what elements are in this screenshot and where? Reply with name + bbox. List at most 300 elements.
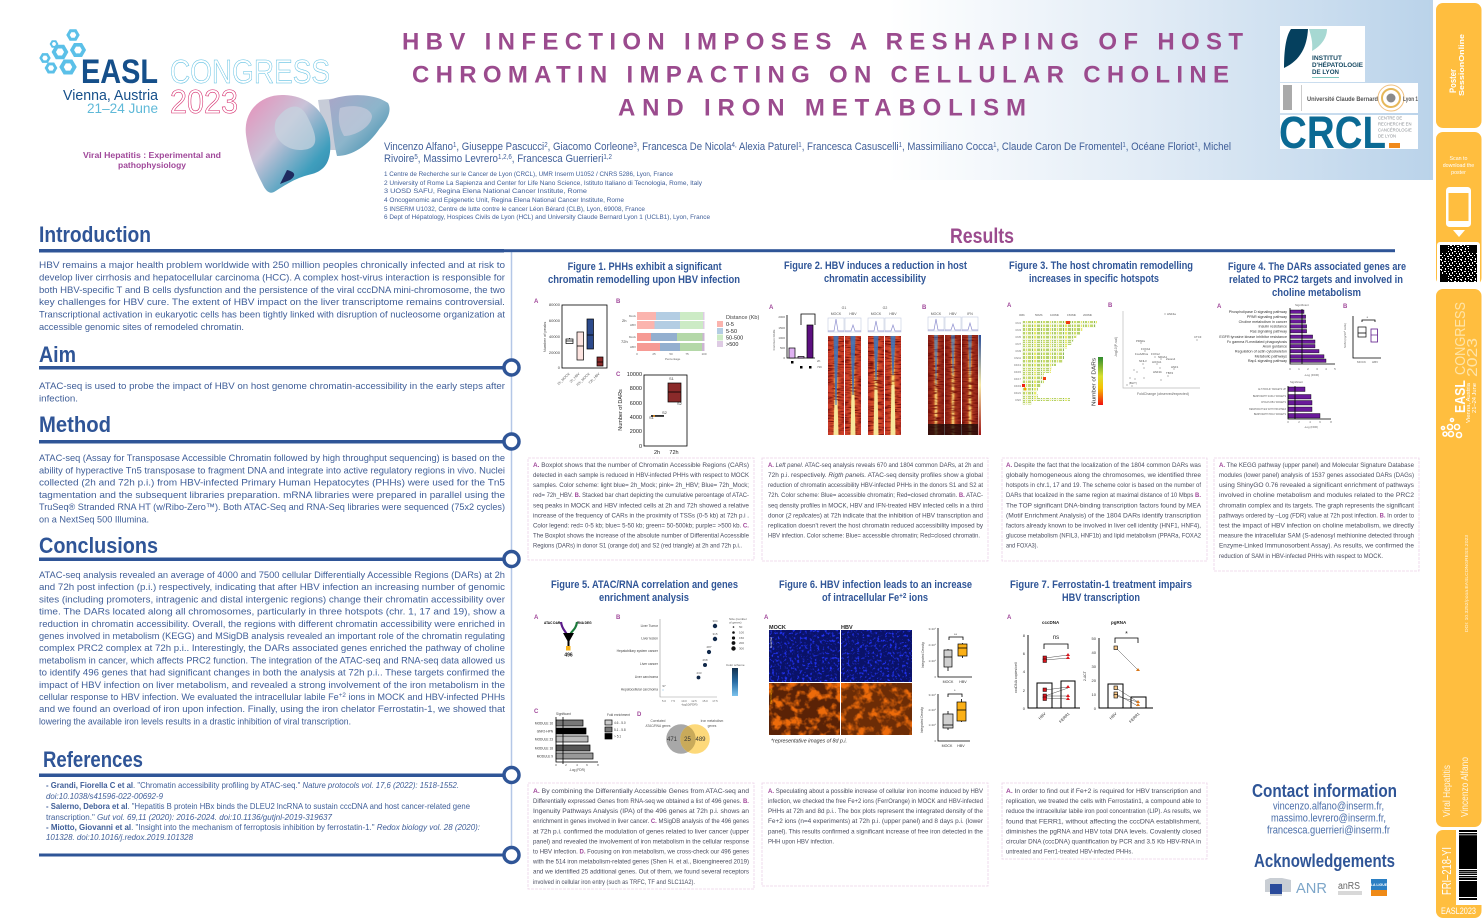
text: introduction body bbox=[39, 260, 505, 333]
figure 6 box plot: 72h bbox=[921, 627, 972, 684]
affiliations: 3 UOSD SAFU, Regina Elena National Cancer Institute, Rome bbox=[384, 188, 588, 195]
figure 4 panel A: KEGG pathway bars: PPAR signaling pathway bbox=[1247, 315, 1287, 319]
heading: Method: Method bbox=[39, 412, 111, 437]
figure 5 panel B: IPA dot plot: 315 bbox=[712, 632, 718, 636]
figure 6 box plot: 8d: 3×10⁶ bbox=[929, 693, 936, 697]
figure 2 panel A: common DARs bar chart: 1000 bbox=[778, 336, 785, 340]
figure 5 caption: A. By combining the Differentially Accessible Genes from ATAC-seq and bbox=[533, 788, 750, 795]
sidebar panel: scan to download: Scan to bbox=[1450, 156, 1468, 162]
figure 5 caption: involved in cellular iron entry (such as TRFC, TF and SLC11A2). bbox=[533, 879, 695, 886]
figure 7 chart: pgRNA: * bbox=[1125, 631, 1128, 638]
figure 3 panel B: transcription factor scatter: TBX3 bbox=[1166, 371, 1173, 375]
figure 5 panel A: overlap funnel: A bbox=[534, 615, 539, 621]
affiliations: 5 INSERM U1032, Centre de lutte contre le cancer Léon Bérard (CLB), Lyon, 69008, France bbox=[384, 206, 645, 213]
figure 6 box plot: 72h: HBV bbox=[959, 680, 967, 684]
logo: Université Claude Bernard Lyon 1: Lyon 1 bbox=[1403, 97, 1419, 103]
figure 7 chart: cccDNA: cccDNA bbox=[1042, 620, 1060, 625]
figure 5 caption: Differentially expressed Genes from RNA-seq we obtained a list of 496 genes. B. bbox=[533, 798, 749, 805]
figure 5 panel B: IPA dot plot: Liver lesion bbox=[641, 636, 658, 640]
figure 4 panel A: KEGG pathway bars bbox=[1217, 303, 1336, 377]
text: method body: ATAC-seq (Assay for Transposase Accessible Chromatin followed by high throughput sequencing) is based on the bbox=[39, 453, 505, 464]
figure 3 caption: DARs that localized in the same region at maximal distance of 10 Mbps B. bbox=[1006, 492, 1201, 499]
authors: 3 bbox=[633, 142, 637, 149]
figure 3 panel A: chromosome heatmap: 0Mb bbox=[1019, 313, 1025, 317]
figure 1 legend: distance: Distance (Kb) bbox=[726, 315, 759, 321]
figure 2 panel A: common DARs bar chart: 1500 bbox=[778, 326, 785, 330]
figure 7 chart: pgRNA: HBV bbox=[1108, 711, 1118, 721]
figure 4 panel A: KEGG pathway bars: EGFR tyrosine kinase inhibitor resistance bbox=[1219, 335, 1287, 339]
figure 2 panel A: common DARs bar chart bbox=[769, 305, 822, 369]
figure 5 panel B: IPA dot plot: 17.5 bbox=[712, 699, 718, 703]
figure 4 panel A: KEGG pathway bars: Significant bbox=[1295, 303, 1309, 307]
figure 5 caption: and we identified 25 additional genes. Out of them, we found several receptors bbox=[533, 869, 749, 876]
figure 3 caption: glucose metabolism (NFIL3, HNF1b) and lipid metabolism (PPARa, FOXA2 bbox=[1006, 533, 1201, 540]
figure 1 panel C: DARs box plot: 0 bbox=[639, 444, 642, 450]
figure 6 title: +2 bbox=[899, 591, 906, 600]
figure 1 panel A: box plot of peaks: 72h_MOCK bbox=[575, 371, 591, 387]
figure 6 microscopy panels: MOCK bbox=[769, 625, 786, 631]
logo: ANR: ANR bbox=[1296, 880, 1327, 897]
figure 3 panel A: chromosome heatmap: 200Mb bbox=[1083, 313, 1093, 317]
figure 5 panel C legend: fold enrichment: > 5.1 bbox=[614, 734, 621, 738]
title: HBV INFECTION IMPOSES A RESHAPING OF HOST bbox=[402, 28, 1243, 56]
heading: Results: Results bbox=[950, 225, 1014, 248]
text: conclusions body: genes involved in metabolism (KEGG) and MSigDB analysis revealed an important role of the chromatin regulating bbox=[39, 631, 505, 642]
logo: CRCL: DE LYON bbox=[1378, 134, 1396, 138]
session label: Viral Hepatitis : Experimental and bbox=[83, 150, 221, 160]
figure 2 caption: replication doesn't revert the host chromatin reduced accessibility imposed by bbox=[768, 522, 984, 530]
figure 1 panel B: stacked bars: Mock bbox=[629, 335, 636, 339]
figure 5 panel B: IPA dot plot: Hepatocellular carcinoma bbox=[621, 688, 658, 692]
text: introduction body: both HBV-specific T and B cells dysfunction and the persistence of the viral cccDNA mini-chromosome, the two bbox=[39, 285, 505, 296]
figure 2 caption: 72h. Color scheme: Blue= accessible chromatin; Red=closed chromatin. B. ATAC- bbox=[768, 492, 983, 499]
figure 3 title: Figure 3. The host chromatin remodelling bbox=[1009, 260, 1193, 272]
figure 1 panel A: box plot of peaks bbox=[534, 299, 607, 387]
figure 5 panel D: Venn diagram: 471 bbox=[667, 737, 678, 743]
text: reference list: - Grandi, Fiorella C et al. "Chromatin accessibility profiling by ATAC-seq." Nature protocols vol. 17,6 (2022): 1518-1552. bbox=[46, 780, 459, 790]
figure 3 panel B: transcription factor scatter: HNF4a bbox=[1167, 312, 1176, 316]
text: reference list: doi:10.1038/s41596-022-00692-9 bbox=[46, 791, 163, 801]
section: Conclusions bbox=[39, 533, 519, 727]
figure 2 panel: density heatmaps: MOCK bbox=[831, 312, 842, 316]
figure 4 title: Figure 4. The DARs associated genes are bbox=[1228, 261, 1406, 273]
figure 7 chart: cccDNA: HBV bbox=[1037, 711, 1047, 721]
authors: 1 bbox=[1122, 142, 1126, 149]
figure 6 box plot: 72h: ** bbox=[954, 632, 958, 637]
figure 3 title: increases in specific hotspots bbox=[1029, 273, 1159, 285]
figure 5 panel B legends bbox=[726, 617, 747, 696]
figure 3 panel B: transcription factor scatter: B bbox=[1108, 303, 1113, 309]
figure 3 panel A: chromosome heatmap: Chr19 bbox=[1014, 384, 1022, 388]
figure 5 panel B legends: 50 bbox=[739, 625, 743, 629]
figure 7 title bbox=[1010, 579, 1192, 604]
figure 4 panel A: KEGG pathway bars: 2 bbox=[1307, 367, 1309, 371]
authors: , Francesca Casuscelli bbox=[802, 141, 899, 153]
logo: Université Claude Bernard Lyon 1 bbox=[1280, 83, 1419, 113]
affiliations: 4 Oncogenomic and Epigenetic Unit, Regina Elena National Cancer Institute, Rome bbox=[384, 197, 624, 204]
section connector line bbox=[510, 251, 512, 855]
figure 2 caption: donor (2 replicates) at 72h indicate that the inhibition of HBV transcription and bbox=[768, 512, 983, 519]
figure 3 panel A: chromosome heatmap: Chr17 bbox=[1014, 377, 1022, 381]
figure 2 panel: density heatmaps bbox=[828, 306, 901, 435]
figure 6 title: of intracellular Fe bbox=[822, 592, 914, 604]
figure 1 caption: increase of the frequency of CARs in the proximity of TSSs (0-5 kb) at 72h p.i . bbox=[533, 512, 749, 519]
figure 5 panel C: MSigDB bars: MODULE 23 bbox=[535, 738, 553, 742]
figure 3 panel A: chromosome heatmap: Chr9 bbox=[1015, 349, 1022, 353]
text: conclusions body: cellular response to HBV infection. We evaluated the intracellular labile Fe bbox=[39, 692, 350, 703]
figure 1 panel C: DARs box plot: C bbox=[616, 372, 621, 378]
figure 2 caption bbox=[762, 458, 988, 561]
figure 6 box plot: 8d bbox=[920, 688, 970, 748]
text: aim body bbox=[39, 381, 505, 404]
figure 5 panel B: IPA dot plot: 97 bbox=[662, 684, 666, 688]
figure 1 caption: detected in each sample is reduced in HBV-infected PHHs with respect to MOCK bbox=[533, 472, 750, 479]
figure 2 caption: reduction of chromatin accessibility HBV-infected PHHs in the donors S1 and S2 at bbox=[768, 482, 983, 489]
figure 1 caption: The Boxplot shows the increase of the absolute number of Differential Accessible bbox=[533, 533, 749, 540]
sidebar panel: scan to download: poster bbox=[1451, 170, 1466, 176]
text: conclusions body: +2 bbox=[339, 692, 346, 699]
figure 2 panel A: common DARs bar chart: 500 bbox=[780, 346, 785, 350]
figure 5 panel D: Venn diagram: D bbox=[637, 712, 642, 718]
figure 1 panel C: DARs box plot: 2000 bbox=[630, 429, 642, 435]
text: introduction body: HBV remains a major health problem worldwide with 250 million peoples chronically infected and at risk to bbox=[39, 260, 505, 271]
section: Introduction bbox=[39, 222, 505, 333]
figure 5 panel B: IPA dot plot: Liver cancer bbox=[640, 662, 659, 666]
authors: 1 bbox=[798, 142, 802, 149]
figure 4 caption: test the impact of HBV infection on choline metabolism, we directly bbox=[1219, 522, 1415, 530]
sidebar panel: scan to download: download the bbox=[1443, 163, 1474, 169]
icon: hexagon cluster bbox=[1442, 418, 1462, 438]
figure 5 panel D: Venn diagram bbox=[637, 712, 724, 754]
figure 4 panel A: MSigDB module bars: BENPORATH SUZ12 TARGETS bbox=[1253, 395, 1286, 398]
figure 5 caption: to HBV infection. D. Focusing on iron metabolism, we cross-check our 496 genes bbox=[533, 848, 749, 856]
sidebar panel: congress and poster data bbox=[1436, 289, 1482, 827]
figure 5 panel B legends: Color scheme bbox=[726, 663, 745, 667]
sidebar panel: poster number and barcode: FRI–218-YI bbox=[1439, 847, 1454, 895]
text: reference list: transcription." Gut vol. 69,11 (2020): 2016-2024. doi:10.1136/gutjnl-2019-319637 bbox=[46, 812, 333, 822]
sidebar panel: poster session online: Poster bbox=[1448, 69, 1458, 93]
figure 3 panel A: chromosome heatmap: 150Mb bbox=[1067, 313, 1077, 317]
figure 7 chart: cccDNA: 6 bbox=[1023, 651, 1026, 656]
figure 1 panel C: DARs box plot: S2 bbox=[677, 401, 683, 406]
figure 2 panel: density heatmaps: MOCK bbox=[871, 312, 882, 316]
figure 5 caption bbox=[528, 783, 754, 889]
figure 1 panel A: box plot of peaks: 72h_HBV bbox=[588, 371, 601, 385]
figure 1 panel B: stacked bars: HBV bbox=[630, 345, 636, 349]
figure 4 title: choline metabolism bbox=[1272, 287, 1361, 299]
figure 3 caption: hotspots in chr.1, 17 and 19. The scheme color is based on the number of bbox=[1006, 482, 1201, 489]
figure 4 panel A: KEGG pathway bars: 0 bbox=[1289, 367, 1291, 371]
figure 5 panel B: IPA dot plot: Hepatobiliary system cancer bbox=[617, 649, 659, 653]
figure 4 caption: A. The KEGG pathway (upper panel) and Molecular Signature Database bbox=[1219, 462, 1414, 469]
figure 5 panel C: MSigDB bars: MODULE 18 bbox=[535, 746, 553, 750]
figure 3 caption: globally homogeneous along the chromosomes, we identified three bbox=[1006, 472, 1202, 479]
figure 2 caption: seq density profiles in MOCK, HBV and IFN-treated HBV infected cells in a third bbox=[768, 502, 983, 509]
figure 7 title: HBV transcription bbox=[1062, 592, 1140, 604]
figure 2 title: chromatin accessibility bbox=[824, 273, 927, 285]
figure 7 chart: cccDNA: 4 bbox=[1023, 669, 1026, 674]
figure 5 panel C legend: fold enrichment: 5.1 - 5.8 bbox=[614, 728, 626, 732]
sidebar panel: congress and poster data: Vienna, Austria bbox=[1466, 383, 1472, 423]
figure 3 caption: The TOP significant DNA-binding transcription factors found by MEA bbox=[1006, 502, 1202, 509]
text: introduction body: Transcriptional activation in eukaryotic cells has been tightly linked with disruption of nucleosome organization at bbox=[39, 310, 505, 321]
figure 4 panel B: SAM box plot: HBV bbox=[1372, 360, 1378, 364]
heading: References: References bbox=[43, 747, 143, 772]
authors: 2 bbox=[544, 142, 548, 149]
figure 5 panel D: Venn diagram: genes bbox=[708, 724, 717, 728]
figure 6 caption bbox=[762, 783, 988, 886]
figure 5 panel B: IPA dot plot: 268 bbox=[702, 658, 708, 662]
figure 4 panel A: KEGG pathway bars: 1 bbox=[1298, 367, 1300, 371]
text: introduction body: accessible genomic sites of remodeled chromatin. bbox=[39, 322, 244, 333]
figure 5 panel B: IPA dot plot: 304 bbox=[712, 619, 718, 623]
figure 4 caption bbox=[1214, 458, 1419, 571]
figure 3 panel B: transcription factor scatter: (BLIT) bbox=[1129, 381, 1137, 385]
figure 1 panel B: stacked bars: 0 bbox=[636, 352, 638, 356]
logo: CRCL: CANCÉROLOGIE bbox=[1378, 128, 1412, 132]
acknowledgements: Acknowledgements bbox=[1254, 851, 1395, 871]
figure 1 panel B: stacked bars: 75 bbox=[685, 352, 689, 356]
figure 5 panel B: IPA dot plot: 12.5 bbox=[691, 699, 697, 703]
figure 4 panel A: MSigDB module bars bbox=[1249, 380, 1332, 429]
figure 3 panel A: chromosome heatmap: A bbox=[1007, 303, 1012, 309]
figure 6 box plot: 8d: 0 bbox=[934, 739, 936, 743]
figure 6 box plot: 8d: HBV bbox=[957, 744, 965, 748]
section: Method bbox=[39, 412, 519, 526]
figure 3 panel B: transcription factor scatter bbox=[1108, 303, 1202, 396]
figure 6 box plot: 72h: 2×10⁶ bbox=[929, 643, 936, 647]
text: conclusions body: and 72h post infection (p.i.) respectively, indicating that after HBV infection an increasing number of genomic bbox=[39, 582, 505, 593]
figure 7 caption: circular DNA (cccDNA) quantification by PCR and 3.5 Kb HBV-RNA in bbox=[1006, 838, 1201, 846]
figure 5 caption: panel) and revealed the involvement of iron metabolism in the cellular response bbox=[533, 838, 749, 845]
EASL Congress logo: Vienna, Austria bbox=[63, 87, 159, 104]
figure 7 chart: cccDNA: A bbox=[1007, 615, 1012, 621]
figure 7 chart: cccDNA: 8 bbox=[1023, 633, 1026, 638]
figure 6 caption: panel). This results confirmed a significant increase of free iron detected in the bbox=[768, 828, 983, 835]
figure 2 panel A: common DARs bar chart: 72h bbox=[817, 365, 822, 369]
figure 1 caption: Regions (DARs) in donor S1 (orange dot) and S2 (red triangle) at 2h and 72h p.i.. bbox=[533, 543, 742, 550]
figure 4 panel A: KEGG pathway bars: 3 bbox=[1316, 367, 1318, 371]
figure 1 panel C: DARs box plot: S1 bbox=[649, 415, 655, 420]
figure 6 box plot: 8d: 1×10⁶ bbox=[929, 723, 936, 727]
figure 2 panel A: common DARs bar chart: 0 bbox=[783, 356, 785, 360]
figure 5 panel B: IPA dot plot: -log10(FDR) bbox=[681, 702, 698, 706]
figure 3 title bbox=[1009, 260, 1193, 285]
text: method body: on a NextSeq 500 Illumina. bbox=[39, 514, 149, 526]
affiliations: 6 Dept of Hépatology, Hospices Civils de Lyon (HCL) and University Claude Bernard Lyon 1 (UCLB1), Lyon, France bbox=[384, 214, 710, 221]
figure 1 panel A: box plot of peaks: 20000 bbox=[549, 350, 561, 355]
authors: , Giuseppe Pascucci bbox=[456, 141, 544, 153]
figure 4 panel B: SAM box plot: SAM (ng/10⁶ cells) bbox=[1343, 323, 1347, 348]
text: conclusions body: impact of HBV infection on liver metabolism, and revealed a strong involvement of the iron metabolism in the bbox=[39, 680, 505, 691]
authors: , Massimo Levrero bbox=[418, 153, 498, 165]
figure 1 panel C: DARs box plot: S2 bbox=[662, 410, 668, 415]
figure 3 panel B: transcription factor scatter: PPARa bbox=[1136, 339, 1145, 343]
figure 5 panel C legend: fold enrichment: 4.6 - 5.0 bbox=[614, 721, 626, 725]
sidebar panel: scan to download bbox=[1436, 132, 1482, 285]
figure 3 panel B: transcription factor scatter: FOXA2 bbox=[1141, 347, 1151, 351]
figure 3 caption: and FOXA3). bbox=[1006, 543, 1038, 550]
text: conclusions body: reduction in chromatin accessibility. Overall, the regions with different chromatin accessibility were enriched in bbox=[39, 619, 505, 630]
figure 5 panel B: IPA dot plot: B bbox=[616, 615, 621, 621]
figure 7 chart: cccDNA: ns bbox=[1053, 635, 1059, 641]
figure 1 panel B: stacked bars: 50 bbox=[669, 352, 673, 356]
figure 7 chart: cccDNA bbox=[1007, 615, 1080, 724]
section: Aim bbox=[39, 342, 519, 404]
figure 1 panel C: DARs box plot: 8000 bbox=[630, 386, 642, 392]
figure 6 microscopy panels: HBV bbox=[841, 625, 853, 631]
figure 6 note: *representative images of 8d p.i. bbox=[771, 738, 847, 744]
icon: arrow down bbox=[1453, 230, 1465, 237]
figure 5 title: enrichment analysis bbox=[599, 592, 689, 604]
figure 4 panel A: KEGG pathway bars: A bbox=[1217, 304, 1222, 310]
figure 5 panel B: IPA dot plot: 233 bbox=[696, 671, 702, 675]
authors: 1 bbox=[1194, 142, 1198, 149]
contact information bbox=[1252, 781, 1397, 836]
results rule bbox=[504, 249, 1395, 252]
text: conclusions body: and we found an overload of iron upon infection. Finally, using the iron chelator Ferrostatin-1, we showed that bbox=[39, 704, 505, 715]
sidebar panel: congress and poster data: Viral Hepatitis bbox=[1442, 765, 1453, 817]
text: conclusions body: metabolism in cancer, which affects PRC2 function. The integration of the ATAC-seq and RNA-seq data allowed us bbox=[39, 655, 505, 666]
figure 7 caption: replication, we treated the cells with Ferrostatin1, a compound able to bbox=[1006, 798, 1201, 805]
authors: Vincenzo Alfano bbox=[384, 141, 463, 153]
figure 3 panel A: chromosome heatmap: ChrX bbox=[1015, 398, 1021, 402]
sidebar panel: poster number and barcode bbox=[1436, 830, 1482, 918]
figure 1 panel A: box plot of peaks: Number of peaks bbox=[542, 322, 547, 352]
figure 6 caption: infection, we checked the free Fe+2 ions (FerrOrange) in MOCK and HBV-infected bbox=[768, 798, 983, 805]
text: reference list bbox=[46, 780, 481, 842]
figure 4 panel A: KEGG pathway bars: Axon guidance bbox=[1263, 344, 1287, 348]
figure 7 chart: pgRNA: 20 bbox=[1092, 678, 1097, 683]
figure 1 panel A: box plot of peaks: 2h_HBV bbox=[569, 371, 581, 384]
text: introduction body: develop liver cirrhosis and hepatocellular carcinoma (HCC). A complex host-virus interaction is responsible for bbox=[39, 272, 505, 283]
authors: 1,2 bbox=[603, 154, 612, 161]
figure 1 panel A: box plot of peaks: 80000 bbox=[549, 302, 561, 307]
figure 3 panel B: transcription factor scatter: NFIL3 bbox=[1139, 359, 1147, 363]
EASL Congress logo: 21–24 June bbox=[87, 100, 158, 116]
figure 1 legend: distance: >500 bbox=[726, 342, 738, 348]
figure 3 panel A: chromosome heatmap: Chr3 bbox=[1015, 328, 1022, 332]
figure 4 panel A: MSigDB module bars: CHICAS RB1 TARGETS bbox=[1261, 401, 1286, 404]
affiliations bbox=[384, 171, 710, 221]
figure 6 title: Figure 6. HBV infection leads to an increase bbox=[779, 579, 972, 591]
color legend: number of DARs: Number of DARs bbox=[1092, 357, 1098, 406]
figure 2 panel: density heatmaps: HBV bbox=[889, 312, 897, 316]
text: conclusions body: ATAC-seq analysis revealed an average of 4000 and 7500 cellular Differentially Accessible Regions (DARs) at 2h bbox=[39, 570, 505, 581]
figure 4 panel A: MSigDB module bars: 6 bbox=[1319, 420, 1321, 424]
authors: 5 bbox=[414, 154, 418, 161]
figure 1 panel A: box plot of peaks: A bbox=[534, 299, 539, 305]
figure 2 panel B: density heatmaps with IFN: HBV bbox=[949, 312, 957, 316]
figure 2 panel B: density heatmaps with IFN: MOCK bbox=[931, 312, 942, 316]
figure 2 caption: A. Left panel. ATAC-seq analysis reveals 670 and 1804 common DARs, at 2h and bbox=[768, 462, 983, 469]
figure 1 caption: A. Boxplot shows that the number of Chromatin Accessible Regions (CARs) bbox=[533, 462, 749, 469]
text: method body: TruSeq® Stranded RNA HT (w/Ribo-Zero™). Both ATAC-Seq and RNA-Seq libraries were sequenced (75x2 cycles) bbox=[39, 502, 505, 513]
figure 6 box plot: 72h: Integrated Density bbox=[921, 642, 925, 668]
figure 4 panel A: MSigDB module bars: 2 bbox=[1298, 420, 1300, 424]
figure 6 title bbox=[779, 579, 972, 604]
figure 4 caption: modules (lower panel) analysis of 1537 genes associated DARs (DAGs) bbox=[1219, 472, 1414, 479]
EASL Congress logo: EASL bbox=[81, 53, 158, 91]
figure 4 panel A: KEGG pathway bars: Insulin resistance bbox=[1258, 324, 1287, 328]
figure 3 panel A: chromosome heatmap: 50Mb bbox=[1035, 313, 1043, 317]
figure 4 panel A: KEGG pathway bars: Regulation of actin cytoskeleton bbox=[1235, 350, 1287, 354]
authors: , Massimiliano Cocca bbox=[902, 141, 994, 153]
figure 5 panel B: IPA dot plot: 15.0 bbox=[702, 699, 708, 703]
figure 6 caption: PHHs at 72h and 8d p.i.. The box plots represent the integrated density of the bbox=[768, 808, 983, 815]
authors: , Océane Floriot bbox=[1126, 141, 1194, 153]
sidebar panel: congress and poster data: DOI: 10.3252/pooa.EASLCONGRESS.2023 bbox=[1464, 534, 1469, 632]
affiliations: 1 Centre de Recherche sur le Cancer de Lyon (CRCL), UMR Inserm U1052 / CNRS 5286, Lyon, France bbox=[384, 171, 673, 178]
heading: Aim: Aim bbox=[39, 342, 76, 367]
figure 5 panel A: overlap funnel bbox=[534, 615, 592, 658]
figure 4 caption: Enzyme-Linked Immunosorbent Assay). As results, we confirmed the bbox=[1219, 543, 1414, 550]
logo: EU bbox=[1265, 878, 1291, 896]
figure 3 caption: factors already known to be involved in liver cell identity (HNF1, HNF4), bbox=[1006, 522, 1201, 530]
figure 3 panel B: transcription factor scatter: -log10(P-val) bbox=[1114, 337, 1118, 357]
heading: Introduction: Introduction bbox=[39, 222, 151, 247]
figure 6 microscopy panels: FerrOrange bbox=[769, 688, 773, 704]
logo: Institut d'Hépatologie de Lyon bbox=[1280, 26, 1365, 82]
contact information: massimo.levrero@inserm.fr, bbox=[1271, 812, 1386, 824]
figure 4 panel A: MSigDB module bars: ALT PROLIF TARGETS UP bbox=[1258, 388, 1286, 391]
figure 5 title: Figure 5. ATAC/RNA correlation and genes bbox=[551, 579, 738, 591]
figure 5 panel C: MSigDB bars bbox=[534, 709, 599, 772]
figure 6 title: ions bbox=[906, 592, 928, 604]
authors: , Giacomo Corleone bbox=[548, 141, 633, 153]
figure 1 panel A: box plot of peaks: 0 bbox=[558, 365, 561, 370]
text: reference list: 101328. doi:10.1016/j.redox.2019.101328 bbox=[46, 832, 193, 842]
figure 3 panel A: chromosome heatmap: Chr13 bbox=[1014, 363, 1022, 367]
figure 2 panel B: density heatmaps with IFN: IFN bbox=[967, 312, 973, 316]
figure 7 chart: cccDNA: 0 bbox=[1023, 706, 1026, 711]
icon: liver illustration bbox=[246, 95, 390, 193]
EASL Congress logo bbox=[41, 31, 330, 120]
figure 5 title bbox=[551, 579, 738, 604]
logo: La Ligue bbox=[1371, 879, 1388, 896]
figure 5 panel C: MSigDB bars: -Log (FDR) bbox=[569, 768, 585, 772]
figure 5 panel A: overlap funnel: ATAC DARs bbox=[544, 621, 562, 625]
figure 7 chart: pgRNA bbox=[1083, 620, 1153, 724]
authors: 1 bbox=[993, 142, 997, 149]
sidebar panel: poster number and barcode: EASL2023 bbox=[1441, 906, 1476, 916]
figure 4 panel B: SAM box plot bbox=[1343, 304, 1381, 364]
authors: 1 bbox=[453, 142, 456, 149]
figure 1 panel B: stacked bars bbox=[616, 299, 707, 361]
figure 4 panel A: MSigDB module bars: BENPORATH ES WITH H3K27ME3 bbox=[1249, 408, 1287, 411]
authors: 1,2,6 bbox=[498, 154, 512, 161]
figure 4 panel A: KEGG pathway bars: 4 bbox=[1325, 367, 1327, 371]
figure 2 title: Figure 2. HBV induces a reduction in host bbox=[784, 260, 967, 272]
text: method body bbox=[39, 453, 505, 526]
figure 3 panel A: chromosome heatmap: Chr7 bbox=[1015, 342, 1022, 346]
figure 3 panel A: chromosome heatmap: 100Mb bbox=[1050, 313, 1060, 317]
figure 5 panel C: MSigDB bars: Significant bbox=[556, 712, 571, 716]
header background bbox=[0, 0, 1433, 180]
figure 6 box plot: 8d: MOCK bbox=[942, 744, 953, 748]
figure 5 panel B: IPA dot plot: 287 bbox=[706, 645, 712, 649]
sidebar panel: congress and poster data: 21–24 June bbox=[1472, 383, 1478, 413]
figure 1 legend: distance: 5-50 bbox=[726, 329, 737, 335]
figure 1 title: Figure 1. PHHs exhibit a significant bbox=[568, 261, 722, 273]
figure 4 caption: using ShinyGO 0.76 revealed a significant enrichment of pathways bbox=[1219, 482, 1414, 489]
figure 1 panel A: box plot of peaks: 2h_MOCK bbox=[557, 371, 571, 386]
figure 7 chart: pgRNA: pgRNA bbox=[1111, 620, 1127, 625]
text: method body: tagmentation and the subsequent libraries preparation. mRNA libraries were prepared in parallel using the bbox=[39, 490, 505, 501]
figure 4 panel A: KEGG pathway bars: Rap1 signaling pathway bbox=[1248, 359, 1287, 363]
figure 4 caption: chromatin complex and its targets. The graph represents the significant bbox=[1219, 502, 1414, 509]
figure 7 chart: cccDNA: FERR1 bbox=[1058, 711, 1071, 724]
